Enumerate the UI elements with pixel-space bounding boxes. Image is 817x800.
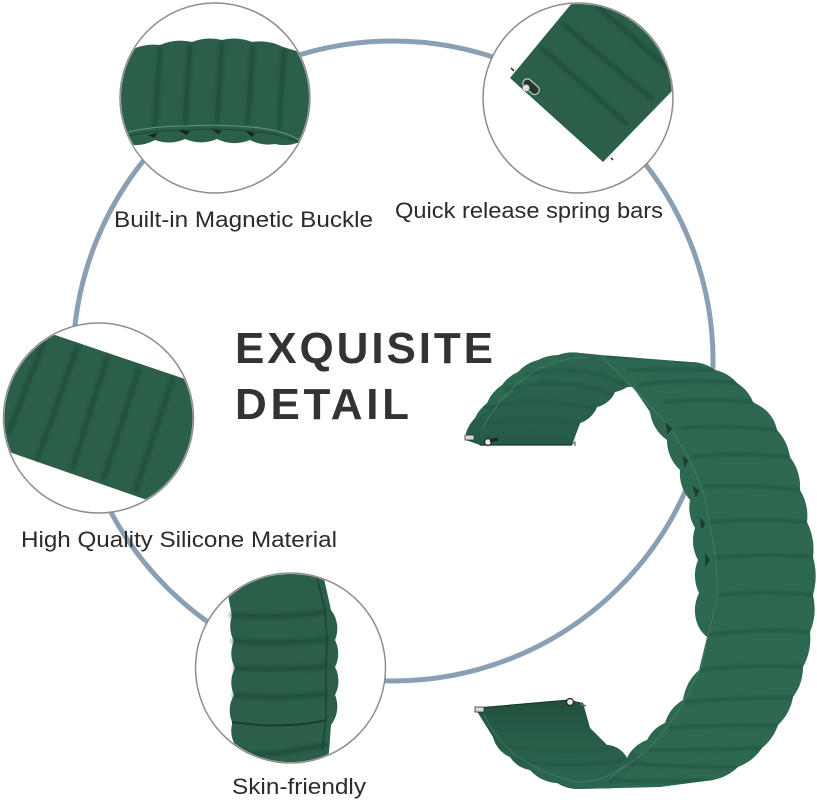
inner edge lobes and links: [483, 355, 718, 782]
title: EXQUISITE: [235, 324, 493, 373]
label: quick release spring bars: Quick release spring bars: [395, 198, 663, 223]
large connecting ring: [73, 41, 713, 681]
panel: skin-friendly: [196, 573, 386, 765]
band fill and shading: [460, 345, 817, 795]
label: high quality silicone material: High Quality Silicone Material: [21, 527, 337, 552]
label: built-in magnetic buckle: Built-in Magnetic Buckle: [114, 207, 373, 232]
icon: bottom pins: [475, 698, 586, 712]
label: skin-friendly: Skin-friendly: [232, 774, 366, 799]
icon: spring bar pins and buckle: [511, 68, 613, 160]
title: DETAIL: [235, 380, 409, 429]
band end edges: [478, 445, 572, 708]
panel: quick release spring bars: [483, 3, 690, 193]
product: green watch band: [460, 345, 817, 795]
icon: top pins: [465, 435, 575, 446]
panel: built-in magnetic buckle: [110, 3, 320, 193]
title: [235, 324, 493, 429]
panel: high quality silicone material: [0, 323, 210, 515]
